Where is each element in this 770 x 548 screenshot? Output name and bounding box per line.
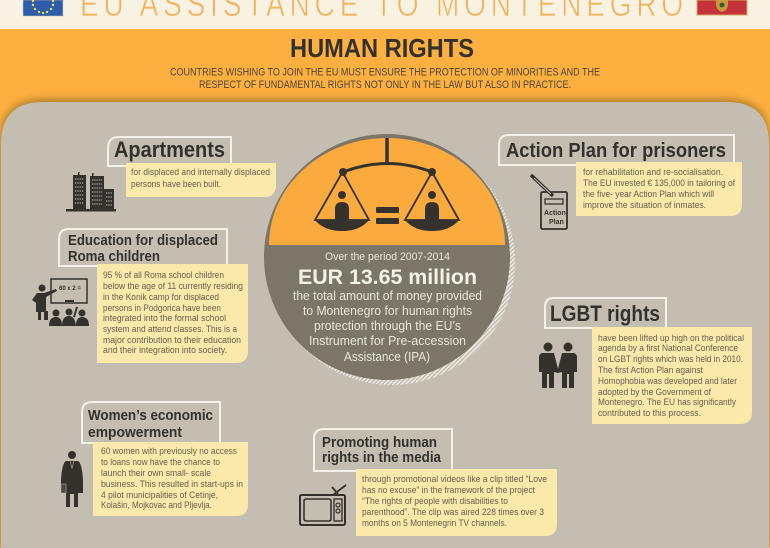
text box bbox=[592, 327, 752, 424]
intro text: COUNTRIES WISHING TO JOIN THE EU MUST ENSURE THE PROTECTION OF MINORITIES AND THE bbox=[170, 66, 600, 78]
heading tab: Apartments bbox=[114, 137, 225, 162]
text box: contributed to this process. bbox=[598, 408, 701, 419]
heading tab bbox=[314, 429, 452, 471]
funding description: Instrument for Pre-accession bbox=[309, 334, 466, 348]
icon: pen and document: Plan bbox=[549, 219, 564, 226]
text box: agenda by a first National Conference bbox=[598, 343, 738, 354]
text box bbox=[93, 442, 248, 516]
circle base bbox=[264, 134, 510, 380]
text box: parenthood”. The clip was aired 228 times over 3 bbox=[362, 507, 544, 518]
funding description: the total amount of money provided bbox=[293, 289, 482, 303]
text box: 95 % of all Roma school children bbox=[103, 270, 224, 281]
icon: businesswoman bbox=[61, 451, 83, 507]
text box: major contribution to their education bbox=[103, 335, 241, 346]
icon: teacher and pupils: 60 x 2 = bbox=[59, 286, 81, 292]
funding description: protection through the EU’s bbox=[314, 319, 461, 333]
text box: has no excuse” in the framework of the project bbox=[362, 485, 535, 496]
text box bbox=[97, 264, 248, 363]
icon: teacher and pupils bbox=[32, 279, 89, 326]
heading tab bbox=[499, 135, 734, 165]
heading tab: Action Plan for prisoners bbox=[506, 140, 726, 162]
heading tab: LGBT rights bbox=[550, 301, 660, 326]
text box: The first Action Plan against bbox=[598, 365, 703, 376]
text box: Montenegro. The EU has significantly bbox=[598, 397, 736, 408]
text box: improve the situation of inmates. bbox=[583, 200, 706, 211]
heading tab: empowerment bbox=[88, 424, 182, 441]
heading tab: Promoting human bbox=[322, 434, 437, 451]
text box: months on 5 Montenegrin TV channels. bbox=[362, 518, 507, 529]
icon: Montenegro flag bbox=[697, 0, 747, 15]
funding amount: EUR 13.65 million bbox=[298, 266, 477, 289]
text box bbox=[126, 163, 276, 197]
text box: launch their own small- scale bbox=[101, 468, 211, 479]
text box: 4 pilot municipalities of Cetinje, bbox=[101, 490, 218, 501]
panel: Promoting human rights in the media bbox=[300, 429, 557, 536]
text box: persons in Podgorica have been bbox=[103, 303, 221, 314]
text box: persons have been built. bbox=[131, 179, 221, 190]
hatched circle shadow bbox=[269, 139, 515, 385]
heading: HUMAN RIGHTS bbox=[290, 33, 474, 63]
icon: apartment buildings bbox=[66, 172, 116, 212]
panel: LGBT rights bbox=[539, 298, 752, 424]
icon: pen and document: Action bbox=[544, 210, 566, 217]
text box: in the Konik camp for displaced bbox=[103, 292, 219, 303]
text box: and their integration into society. bbox=[103, 345, 227, 356]
heading tab: Women’s economic bbox=[88, 407, 213, 424]
heading tab bbox=[82, 402, 220, 443]
funding description: Assistance (IPA) bbox=[344, 350, 430, 364]
text box: “The rights of people with disabilities to bbox=[362, 496, 508, 507]
heading tab: Education for displaced bbox=[68, 232, 218, 249]
heading tab bbox=[59, 229, 227, 266]
icon: two people holding hands bbox=[539, 342, 577, 388]
icon: pen and document bbox=[531, 175, 567, 229]
text box: Homophobia was developed and later bbox=[598, 376, 737, 387]
orange semicircle bbox=[269, 138, 505, 245]
text box bbox=[576, 162, 742, 216]
icon: balance scale bbox=[315, 138, 459, 231]
text box: system and attend classes. This is a bbox=[103, 324, 238, 335]
central circle bbox=[264, 134, 515, 385]
funding period: Over the period 2007-2014 bbox=[325, 251, 450, 263]
panel: Apartments bbox=[66, 137, 276, 212]
text box: for displaced and internally displaced bbox=[131, 167, 270, 178]
funding description: to Montenegro for human rights bbox=[303, 304, 472, 318]
intro text bbox=[170, 66, 600, 91]
heading tab: Roma children bbox=[68, 248, 160, 265]
funding description bbox=[293, 289, 482, 364]
text box: 60 women with previously no access bbox=[101, 446, 237, 457]
intro text: RESPECT OF FUNDAMENTAL RIGHTS NOT ONLY IN THE LAW BUT ALSO IN PRACTICE. bbox=[199, 79, 571, 91]
text box: for rehabilitation and re-socialisation. bbox=[583, 167, 723, 178]
header band bbox=[0, 0, 770, 29]
heading tab: rights in the media bbox=[322, 449, 442, 466]
icon: television bbox=[300, 485, 346, 525]
text box: through promotional videos like a clip titled “Love bbox=[362, 474, 547, 485]
text box: the five- year Action Plan which will bbox=[583, 189, 714, 200]
text box: integrated into the formal school bbox=[103, 313, 226, 324]
icon: EU flag bbox=[23, 0, 63, 16]
text box: business. This resulted in start-ups in bbox=[101, 479, 243, 490]
panel: Action Plan for prisoners bbox=[499, 135, 742, 229]
text box: The EU invested € 135,000 in tailoring of bbox=[583, 178, 735, 189]
text box: to loans now have the chance to bbox=[101, 457, 220, 468]
text box bbox=[356, 469, 557, 536]
panel: Women's economic empowerment bbox=[61, 402, 248, 516]
text box: have been lifted up high on the political bbox=[598, 333, 744, 344]
text box: adopted by the Government of bbox=[598, 387, 711, 398]
panel: Education bbox=[32, 229, 248, 363]
text box: below the age of 11 currently residing bbox=[103, 281, 243, 292]
text box: on LGBT rights which was held in 2010. bbox=[598, 354, 743, 365]
text box: Kolašin, Mojkovac and Pljevlja. bbox=[101, 500, 212, 511]
